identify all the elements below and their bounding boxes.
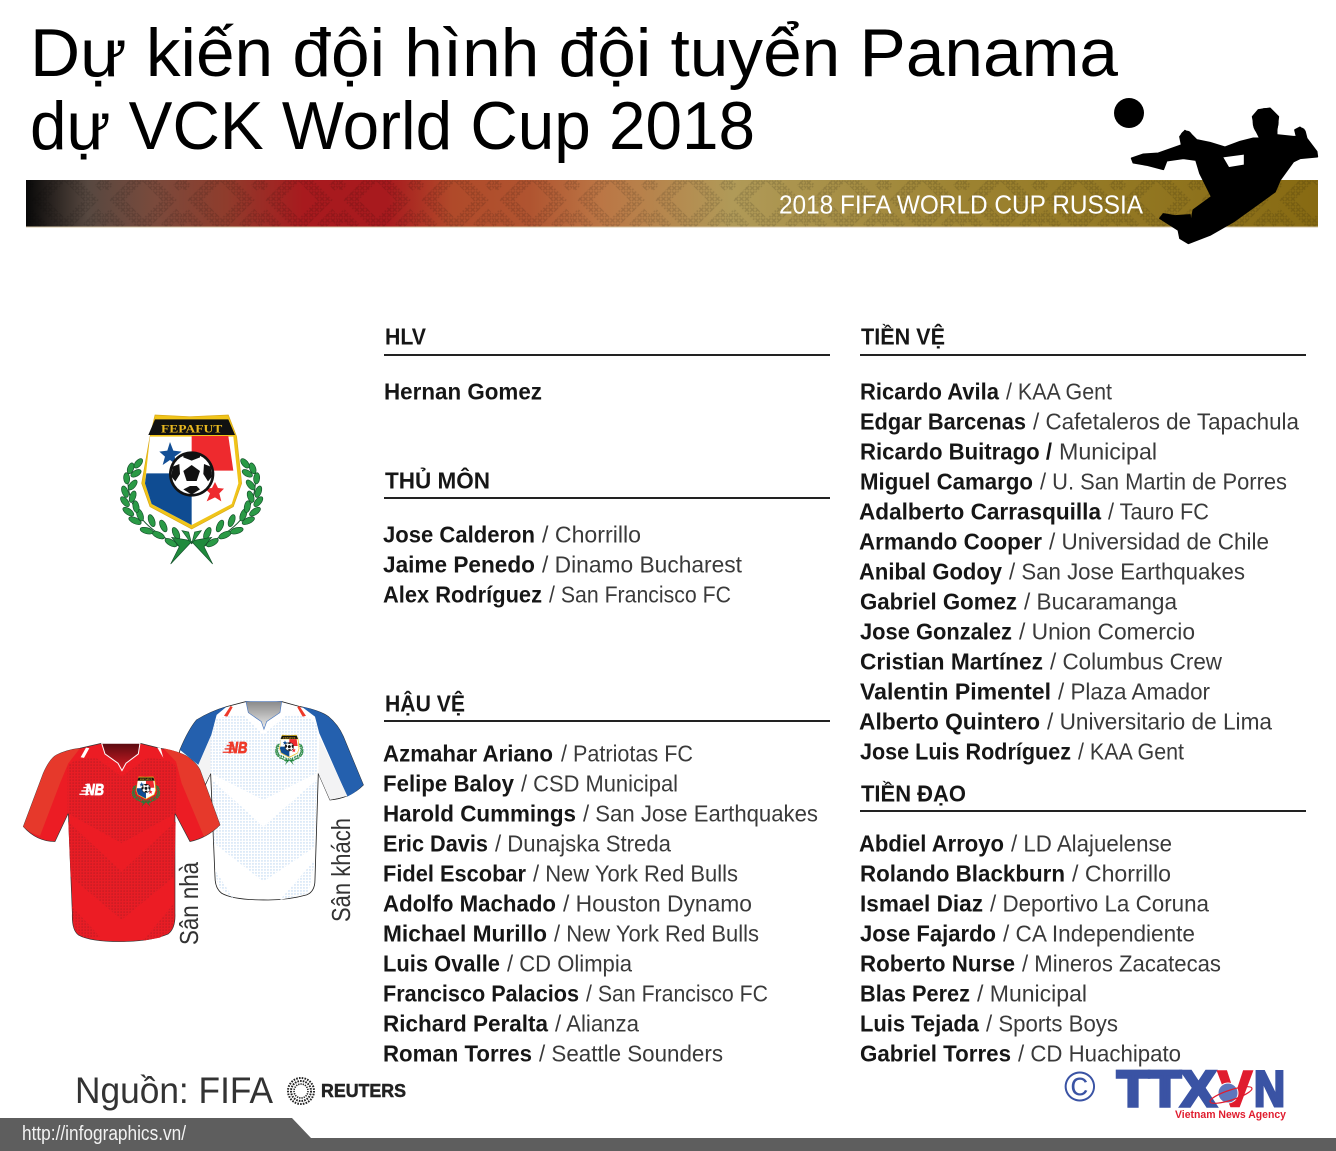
logo: Reuters (288, 1078, 406, 1104)
player list: midfielders: / KAA Gent (1078, 738, 1185, 764)
player list: forwards: / Deportivo La Coruna (990, 890, 1209, 916)
footer url: http://infographics.vn/ (22, 1123, 186, 1145)
player list: defenders: Harold Cummings (383, 800, 576, 826)
player list: defenders: / Patriotas FC (561, 740, 693, 766)
label: away kit: Sân khách (326, 818, 356, 922)
player list: defenders: / New York Red Bulls (554, 920, 759, 946)
player list: goalkeepers: / San Francisco FC (549, 582, 731, 608)
logo: Reuters: REUTERS (321, 1080, 406, 1101)
player list: defenders: Luis Ovalle (383, 950, 500, 976)
player list: midfielders: Jose Luis Rodríguez (860, 738, 1071, 764)
player list: forwards: / Sports Boys (986, 1010, 1118, 1036)
player list: defenders: / CSD Municipal (521, 770, 678, 796)
logo: TTXVN: V (1218, 1061, 1253, 1117)
player list: midfielders: / Bucaramanga (1024, 588, 1177, 614)
jerseys (23, 702, 363, 942)
player list: defenders: / San Francisco FC (586, 980, 768, 1006)
player list: defenders: Richard Peralta (383, 1010, 548, 1036)
label: home kit: Sân nhà (174, 862, 204, 945)
player list: forwards: / CD Huachipato (1018, 1040, 1181, 1066)
player list: goalkeepers: Jaime Penedo (383, 552, 535, 578)
player list: defenders: Azmahar Ariano (383, 740, 553, 766)
player list: forwards: Roberto Nurse (860, 950, 1015, 976)
logo: TTXVN (1117, 1061, 1287, 1121)
player list: midfielders: Gabriel Gomez (860, 588, 1017, 614)
coach name: Hernan Gomez (384, 378, 542, 404)
panel: coach (384, 324, 830, 404)
player list: defenders: Fidel Escobar (383, 860, 526, 886)
mini crest (275, 735, 304, 765)
logo: NB (79, 782, 104, 799)
player list: goalkeepers: / Chorrillo (542, 522, 641, 548)
panel: goalkeepers (383, 466, 830, 608)
player list: midfielders: Anibal Godoy (859, 558, 1002, 584)
logo: TTXVN: N (1254, 1061, 1285, 1117)
player list: defenders: Felipe Baloy (383, 770, 514, 796)
player list: forwards: / CA Independiente (1003, 920, 1195, 946)
player list: forwards: / Mineros Zacatecas (1022, 950, 1221, 976)
player list: defenders: Eric Davis (383, 830, 488, 856)
player list: midfielders (859, 378, 1299, 764)
player list: midfielders: / U. San Martin de Porres (1040, 468, 1287, 494)
player list: defenders: Roman Torres (383, 1040, 532, 1066)
player list: midfielders: Edgar Barcenas (860, 408, 1026, 434)
player list: midfielders: Alberto Quintero (859, 708, 1040, 734)
title: Dự kiến đội hình đội tuyển Panama (30, 15, 1118, 91)
player list: forwards: Rolando Blackburn (860, 860, 1065, 886)
icon: football (1114, 98, 1144, 128)
player list: midfielders: Cristian Martínez (860, 648, 1043, 674)
copyright mark: © (1064, 1063, 1096, 1111)
player list: defenders: Francisco Palacios (383, 980, 579, 1006)
player list: midfielders: Municipal (1059, 438, 1157, 464)
heading: forwards: TIỀN ĐẠO (861, 780, 966, 806)
player list: defenders: / Houston Dynamo (563, 890, 752, 916)
banner (26, 180, 1318, 228)
heading: goalkeepers: THỦ MÔN (385, 466, 490, 494)
logo: NB: NB (229, 740, 247, 757)
player list: midfielders: / Universidad de Chile (1049, 528, 1269, 554)
logo: NB (223, 740, 247, 757)
player list: defenders: / San Jose Earthquakes (583, 800, 818, 826)
panel: defenders (383, 690, 830, 1066)
player list: midfielders: / Universitario de Lima (1047, 708, 1272, 734)
player list: midfielders: / Union Comercio (1019, 618, 1195, 644)
home jersey (23, 743, 220, 942)
footer bar (0, 1118, 1336, 1151)
player list: forwards: Blas Perez (860, 980, 970, 1006)
logo: NB: NB (85, 782, 104, 799)
player list: forwards: Abdiel Arroyo (859, 830, 1004, 856)
player list: midfielders: / San Jose Earthquakes (1009, 558, 1245, 584)
logo: TTXVN: Vietnam News Agency (1175, 1109, 1287, 1121)
heading: coach: HLV (385, 324, 427, 350)
player list: forwards: / Municipal (977, 980, 1087, 1006)
player list: midfielders: Valentin Pimentel (860, 678, 1051, 704)
away jersey (173, 702, 363, 900)
player list: midfielders: Jose Gonzalez (860, 618, 1012, 644)
panel: forwards (859, 780, 1306, 1066)
player list: defenders: Adolfo Machado (383, 890, 556, 916)
player list: goalkeepers: / Dinamo Bucharest (542, 552, 743, 578)
title (30, 15, 1118, 164)
heading: midfielders: TIỀN VỆ (861, 322, 945, 350)
player list: midfielders: Ricardo Buitrago / (860, 438, 1053, 464)
crest: FEPAFUT (119, 415, 264, 564)
source credit: Nguồn: FIFA (75, 1070, 273, 1111)
shield (142, 415, 242, 529)
player list: goalkeepers (383, 522, 743, 608)
player list: midfielders: / Plaza Amador (1058, 678, 1210, 704)
player list: defenders: / New York Red Bulls (533, 860, 738, 886)
player list: midfielders: / Columbus Crew (1050, 648, 1222, 674)
player list: defenders (383, 740, 818, 1066)
banner text: 2018 FIFA WORLD CUP RUSSIA (779, 190, 1144, 220)
player list: defenders: / Alianza (555, 1010, 639, 1036)
panel: midfielders (859, 322, 1306, 764)
title: dự VCK World Cup 2018 (30, 88, 755, 164)
player list: forwards: / Chorrillo (1072, 860, 1171, 886)
player list: midfielders: / Tauro FC (1108, 498, 1209, 524)
player list: midfielders: / KAA Gent (1006, 378, 1113, 404)
player list: forwards (859, 830, 1221, 1066)
mini crest (131, 777, 161, 806)
player list: midfielders: Miguel Camargo (860, 468, 1033, 494)
player list: forwards: Ismael Diaz (860, 890, 983, 916)
logo: TTXVN: TTX (1117, 1061, 1216, 1117)
player list: defenders: / Dunajska Streda (495, 830, 671, 856)
player list: defenders: / CD Olimpia (507, 950, 632, 976)
heading: defenders: HẬU VỆ (385, 690, 465, 716)
laurel wreath (119, 457, 264, 564)
shield: FEPAFUT (161, 422, 222, 436)
player list: midfielders: Adalberto Carrasquilla (859, 498, 1101, 524)
icon: player silhouette (1132, 108, 1317, 243)
player list: forwards: Gabriel Torres (860, 1040, 1011, 1066)
player list: defenders: / Seattle Sounders (539, 1040, 723, 1066)
soccer ball (169, 451, 214, 497)
player list: goalkeepers: Jose Calderon (383, 522, 535, 548)
player list: goalkeepers: Alex Rodríguez (383, 582, 542, 608)
player list: forwards: / LD Alajuelense (1011, 830, 1172, 856)
player list: midfielders: Ricardo Avila (860, 378, 999, 404)
player list: forwards: Jose Fajardo (860, 920, 996, 946)
player list: defenders: Michael Murillo (383, 920, 547, 946)
player list: midfielders: Armando Cooper (859, 528, 1042, 554)
player list: midfielders: / Cafetaleros de Tapachula (1033, 408, 1299, 434)
player list: forwards: Luis Tejada (860, 1010, 979, 1036)
